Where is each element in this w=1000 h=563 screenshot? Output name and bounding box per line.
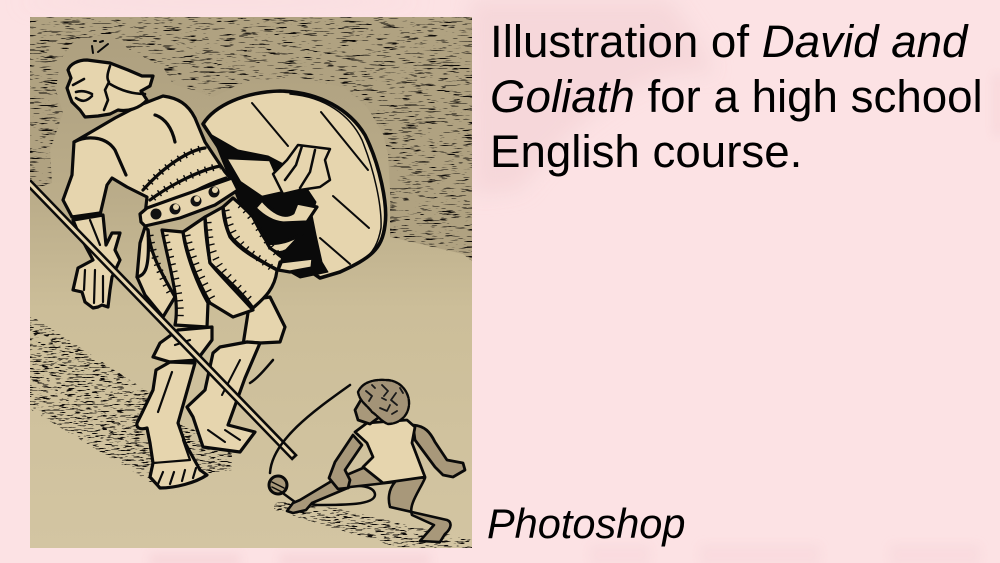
ground shadow under Goliath [30, 310, 240, 485]
Goliath's spear [28, 182, 295, 458]
forearm strap [228, 159, 280, 196]
Goliath [63, 41, 386, 488]
background ground and sky tone [30, 17, 472, 548]
David's head and curly hair [355, 380, 409, 424]
left arm and hand [73, 215, 120, 308]
David's right arm [413, 425, 465, 477]
description text: Illustration of David and [490, 16, 967, 67]
belt with studs [140, 178, 238, 226]
rear leg [187, 297, 285, 452]
torso tunic [63, 96, 238, 217]
head with beard and hair [67, 41, 153, 117]
description text [490, 16, 983, 177]
ground shadow under David [270, 498, 472, 548]
David's legs [287, 468, 451, 542]
David's tunic [355, 420, 425, 483]
David's left arm [329, 435, 362, 489]
software label: Photoshop [487, 500, 685, 547]
David's sling [250, 360, 375, 505]
shield hand [273, 145, 330, 194]
shield [203, 91, 386, 278]
David [287, 380, 465, 542]
description text: English course. [490, 126, 802, 177]
black strap shadow [212, 135, 328, 278]
illustration: David and Goliath [28, 17, 472, 548]
pleated skirt tabs [137, 198, 317, 327]
front leg [137, 327, 212, 488]
sky hatching texture [30, 17, 472, 267]
description text: Goliath for a high school [490, 71, 983, 122]
